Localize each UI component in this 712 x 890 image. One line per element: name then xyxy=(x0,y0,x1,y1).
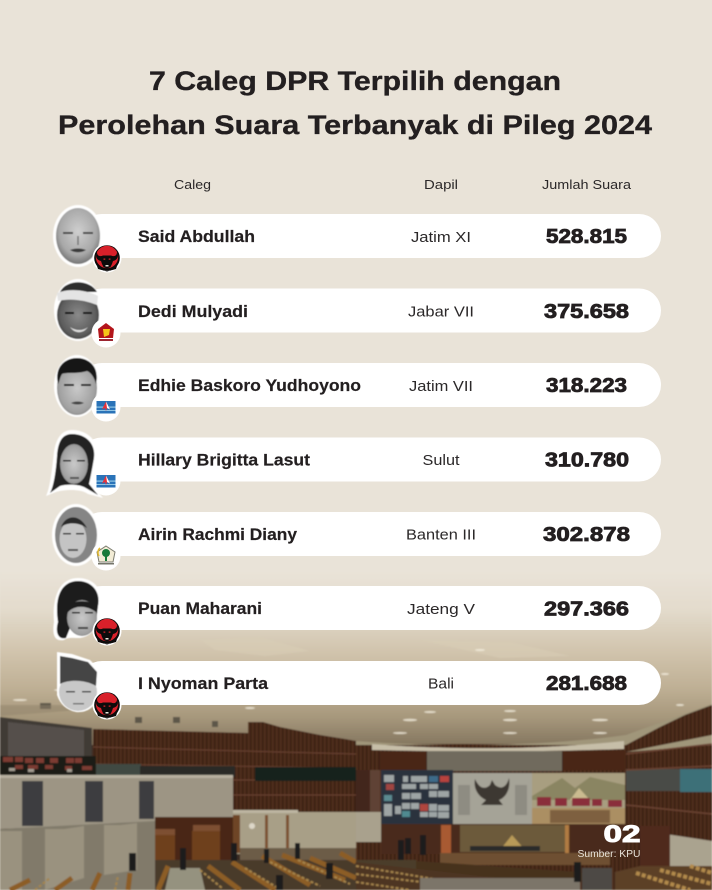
garuda wall xyxy=(453,773,532,825)
right beige wall xyxy=(233,812,356,854)
left floor and desks xyxy=(155,860,356,890)
row 1: Said Abdullah xyxy=(53,205,661,272)
row 6: Puan Maharani: Jateng V xyxy=(407,602,475,618)
row 3: Edhie Baskoro Yudhoyono: Edhie Baskoro Yudhoyono xyxy=(138,377,361,395)
title: Perolehan Suara Terbanyak di Pileg 2024 xyxy=(58,110,652,140)
title xyxy=(58,66,652,140)
row 7: I Nyoman Parta: I Nyoman Parta xyxy=(138,675,269,693)
parliament chamber photo xyxy=(0,570,712,890)
balcony seats xyxy=(0,756,96,775)
row 4: Hillary Brigitta Lasut: 310.780 xyxy=(545,450,629,472)
row 4: Hillary Brigitta Lasut: Sulut xyxy=(422,453,460,469)
row 7: I Nyoman Parta: 281.688 xyxy=(546,673,627,695)
table header: Jumlah Suara xyxy=(542,177,632,192)
title: 7 Caleg DPR Terpilih dengan xyxy=(149,66,561,96)
large screen right xyxy=(532,773,625,825)
ceiling xyxy=(0,570,712,750)
row 6: Puan Maharani xyxy=(53,578,661,646)
row 5: Airin Rachmi Diany: Airin Rachmi Diany xyxy=(138,526,298,544)
page number: 02 xyxy=(604,821,640,848)
right beige wall xyxy=(659,833,712,868)
row 6: Puan Maharani: Puan Maharani xyxy=(138,600,262,618)
left wood band right screen xyxy=(356,770,380,812)
row 4: Hillary Brigitta Lasut xyxy=(46,430,661,498)
row 5: Airin Rachmi Diany: 302.878 xyxy=(543,524,630,546)
row 2: Dedi Mulyadi: Dedi Mulyadi xyxy=(138,303,248,321)
parapet xyxy=(0,775,233,829)
center wall xyxy=(356,744,712,890)
large screen left xyxy=(381,770,453,824)
row 3: Edhie Baskoro Yudhoyono: Jatim VII xyxy=(409,379,473,395)
row 2: Dedi Mulyadi: Jabar VII xyxy=(408,304,474,320)
wood doors xyxy=(155,817,233,873)
row 1: Said Abdullah: Said Abdullah xyxy=(138,228,255,246)
dais desk xyxy=(440,853,610,865)
row 7: I Nyoman Parta: Bali xyxy=(428,676,454,692)
row 7: I Nyoman Parta xyxy=(57,652,661,720)
row 4: Hillary Brigitta Lasut: Hillary Brigitta Lasut xyxy=(138,452,311,470)
row 3: Edhie Baskoro Yudhoyono: 318.223 xyxy=(546,375,627,397)
table header: Dapil xyxy=(424,177,458,192)
table header: Caleg xyxy=(174,177,211,192)
row 5: Airin Rachmi Diany: Banten III xyxy=(406,528,476,544)
row 2: Dedi Mulyadi: 375.658 xyxy=(544,301,629,323)
source: Sumber: KPU xyxy=(578,848,640,860)
right mirror band xyxy=(626,769,712,791)
lower panels xyxy=(0,821,155,890)
ceiling lower band center xyxy=(356,704,712,752)
dark left upper wall xyxy=(0,717,92,758)
row 2: Dedi Mulyadi xyxy=(54,279,661,348)
row 1: Said Abdullah: Jatim XI xyxy=(411,230,471,246)
row 6: Puan Maharani: 297.366 xyxy=(544,598,629,620)
wood wall left xyxy=(93,722,356,812)
row 1: Said Abdullah: 528.815 xyxy=(546,226,627,248)
row 5: Airin Rachmi Diany xyxy=(52,504,661,570)
dais marble backdrop xyxy=(381,824,625,854)
row 3: Edhie Baskoro Yudhoyono xyxy=(54,355,661,422)
table header xyxy=(174,177,632,192)
